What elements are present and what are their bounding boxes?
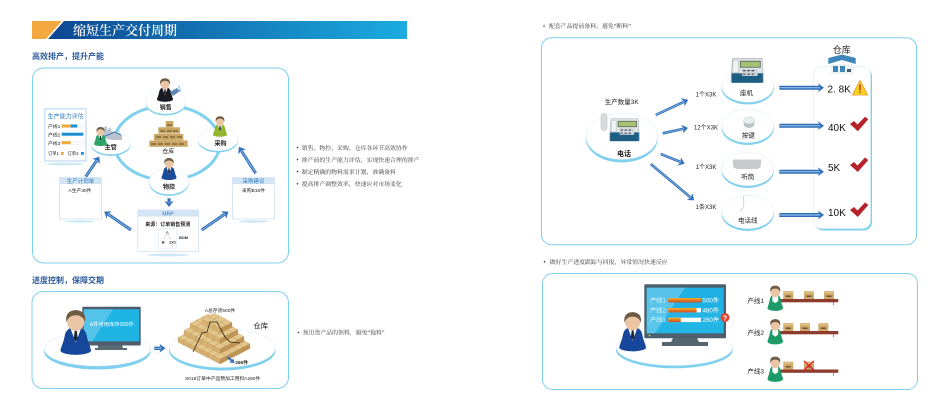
- icon: check: [850, 202, 868, 217]
- platform: [616, 330, 733, 368]
- node: material control: [149, 158, 189, 196]
- label: handset qty: 1个X3K: [696, 164, 716, 171]
- label: total stock: A总存货500件: [205, 307, 235, 314]
- arrow: handset to warehouse: [779, 170, 819, 174]
- capacity evaluation card: 订单2: [68, 150, 79, 157]
- capacity evaluation card: 产线2: [48, 131, 61, 138]
- production line 3: [747, 357, 838, 382]
- value: base stock: 2. 8K: [828, 84, 851, 96]
- monitor: line output: 产线2: [650, 306, 666, 314]
- bullet list: scheduling: [297, 144, 420, 188]
- MRP card: BOM: [179, 236, 188, 240]
- heading: progress control: 进度控制，保障交期: [32, 275, 104, 285]
- node: base: [721, 59, 774, 104]
- bullet: tracking: 做好生产进度跟踪与回报，异常情况快速反应: [550, 258, 668, 266]
- arrow: to handset: [661, 154, 680, 162]
- production plan card: [60, 177, 102, 223]
- platform: warehouse: [169, 328, 276, 370]
- node: cord: [721, 195, 774, 231]
- label: warehouse: 仓库: [253, 320, 269, 330]
- bullet list: scheduling: 销售、物控、采购、仓库各环节高效协作: [302, 144, 408, 152]
- capacity evaluation card: 生产能力评估: [48, 112, 84, 120]
- panel: progress control: [32, 292, 288, 388]
- icon: question badge: [720, 313, 730, 322]
- panel: progress tracking: [542, 274, 918, 390]
- panel: scheduling cycle: [32, 68, 288, 263]
- node: handset: [721, 152, 774, 188]
- node: base: 座机: [740, 88, 754, 97]
- arrow: MRP to plan: [108, 214, 131, 230]
- arrow: to cord: [651, 164, 690, 197]
- arrow: material control to MRP: [168, 198, 170, 202]
- node: sales: 销售: [160, 104, 172, 112]
- MRP card: [138, 210, 199, 256]
- bullet list: scheduling: 排产前的生产能力评估，实现快速合理的排产: [302, 156, 420, 164]
- arrow: proposal to procurement: [242, 151, 256, 173]
- node: material control: 物控: [163, 183, 175, 191]
- platform: planner: [44, 332, 151, 370]
- MRP card: 来源：订单销售预测: [145, 221, 190, 228]
- node: procurement: 采购: [214, 140, 227, 148]
- value: handset stock: 5K: [828, 163, 841, 174]
- MRP card: MRP: [162, 212, 174, 218]
- warehouse title: 仓库: [833, 44, 851, 55]
- production line 2: 产线2: [747, 328, 764, 337]
- monitor: line output: 480件: [702, 306, 719, 314]
- monitor: available stock: A件可用库存300件: [90, 320, 134, 328]
- node: telephone: [586, 114, 658, 162]
- label: preprocessing: S018订单中产品预加工用料A260件: [185, 375, 260, 382]
- icon: check: [850, 158, 868, 172]
- production line 3: 产线3: [747, 366, 764, 376]
- bullet: kitting: [543, 22, 631, 30]
- label: 260 pieces: 260件: [235, 359, 248, 366]
- arrow: plan to manager: [86, 161, 97, 177]
- purchase proposal card: [232, 177, 274, 223]
- arrow: key to warehouse: [779, 124, 819, 128]
- monitor: line output: 260件: [702, 316, 719, 324]
- MRP card: 2xC: [169, 240, 176, 244]
- value: key stock: 40K: [828, 123, 846, 134]
- value: cord stock: 10K: [828, 208, 846, 219]
- arrow: to keys: [663, 129, 683, 133]
- icon: supervisor: [619, 312, 646, 351]
- production plan card: A生产30件: [69, 187, 92, 194]
- icon: check: [850, 117, 868, 131]
- icon: warehouse building: [828, 54, 856, 74]
- label: production quantity: 生产数量3K: [605, 97, 639, 106]
- node: sales: [146, 78, 186, 116]
- bullet: kitting: 配套产品提前备料，避免“断料”: [549, 22, 631, 30]
- warehouse column: [814, 67, 872, 230]
- node: key: 按键: [742, 130, 755, 140]
- purchase proposal card: 采购建议: [242, 177, 265, 185]
- capacity evaluation card: [45, 109, 86, 165]
- label: key qty: 12个X3K: [694, 124, 718, 132]
- monitor: line output: 500件: [702, 296, 719, 304]
- title: 缩短生产交付周期: [73, 23, 177, 38]
- monitor: line output: 产线3: [650, 316, 666, 324]
- label: base qty: 1个X3K: [696, 92, 716, 98]
- bullet list: scheduling: 制定精确的物料需求计划，准确备料: [302, 168, 396, 176]
- icon: question badge: ?: [723, 313, 728, 322]
- production line 1: 产线1: [747, 296, 764, 305]
- ring: [114, 106, 220, 180]
- node: production manager: 主管: [105, 144, 117, 152]
- capacity evaluation card: 订单1: [48, 150, 60, 157]
- node: handset: 听筒: [741, 172, 755, 181]
- icon: warning: [852, 80, 868, 95]
- node: procurement: [198, 116, 238, 152]
- arrow: to base: [656, 102, 684, 115]
- node: cord: 电话线: [738, 216, 758, 224]
- icon: planner: [60, 310, 91, 355]
- arrow: 260: [228, 357, 234, 363]
- node: production manager: [91, 126, 131, 156]
- production plan card: 生产计划单: [67, 177, 95, 185]
- arrow: MRP to proposal: [202, 214, 224, 230]
- monitor: available stock: [82, 307, 141, 350]
- heading: efficient scheduling: 高效排产，提升产能: [32, 51, 104, 61]
- capacity evaluation card: 产线1: [48, 123, 61, 130]
- warehouse box pyramid: [149, 121, 188, 147]
- MRP card: A: [166, 230, 169, 235]
- production line 2: [747, 319, 838, 344]
- arrow: cord to warehouse: [779, 213, 819, 217]
- arrow: base to warehouse: [779, 86, 819, 90]
- monitor: line output: 产线1: [650, 296, 666, 304]
- production line 1: [747, 286, 838, 311]
- node: key: [721, 109, 774, 145]
- bullet: material: 预出货产品的领料，避免“拖料”: [303, 328, 385, 336]
- node: telephone: 电话: [617, 149, 631, 158]
- purchase proposal card: 采购B16件: [242, 187, 265, 194]
- label: cord qty: 1条X3K: [696, 203, 716, 211]
- panel: bill of materials: [542, 38, 916, 245]
- MRP card: B: [162, 240, 165, 244]
- warehouse label: 仓库: [162, 148, 174, 156]
- capacity evaluation card: 产线3: [48, 140, 61, 147]
- monitor: line output: [644, 284, 726, 346]
- bullet list: scheduling: 提高排产调整效率，快速应对市场变化: [302, 180, 402, 188]
- box pile: [178, 313, 250, 364]
- arrow: to warehouse: [154, 347, 160, 350]
- header banner: [32, 21, 407, 39]
